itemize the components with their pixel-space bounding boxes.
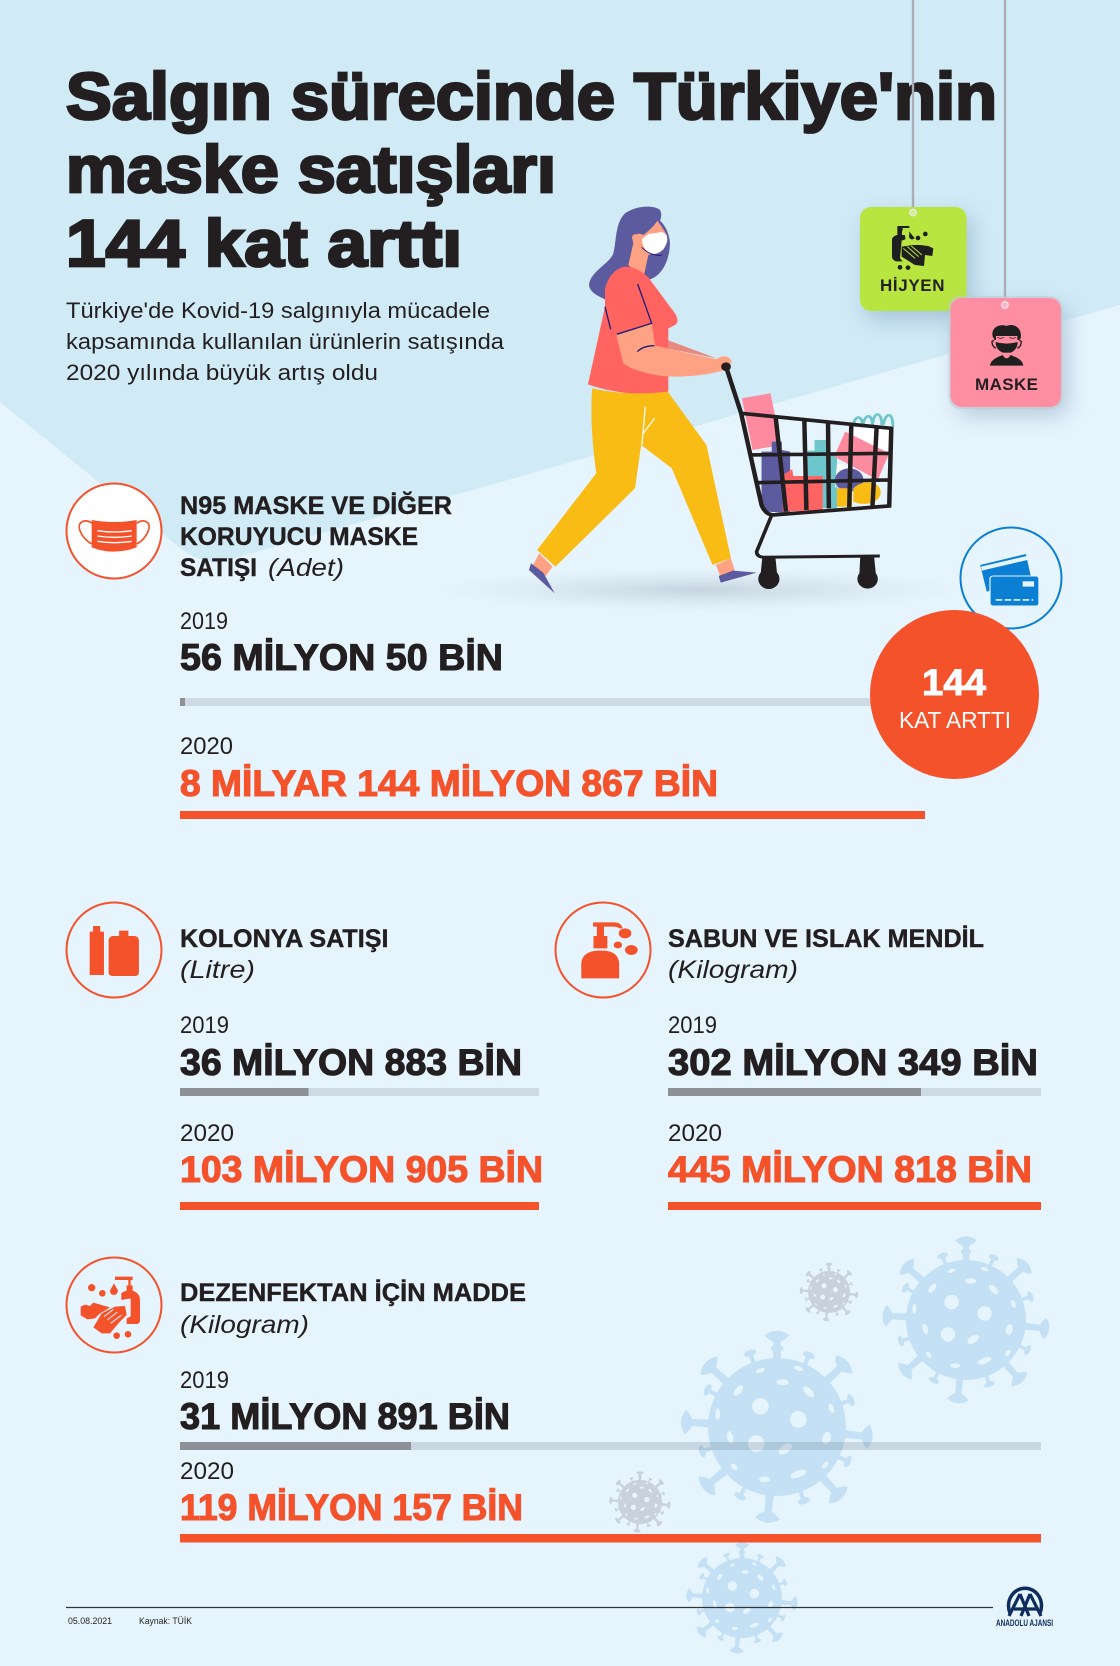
near arm [616, 323, 732, 377]
bar 2019 [180, 1088, 539, 1096]
virus small grey bottom [609, 1471, 671, 1533]
cart frame [726, 367, 891, 515]
heading: KOLONYA SATIŞI [180, 925, 388, 953]
hanging tag strings [913, 0, 1005, 300]
title: Salgın sürecinde Türkiye'nin [66, 59, 997, 133]
face mask [642, 232, 667, 254]
purple round item [835, 468, 864, 492]
2020 value: 2020 [180, 1120, 234, 1147]
2019 value: 36 MİLYON 883 BİN [180, 1042, 522, 1083]
heading [668, 925, 984, 984]
bar 2020 [180, 1202, 539, 1210]
2020 value: 445 MİLYON 818 BİN [668, 1149, 1032, 1190]
bar 2019 [668, 1088, 1041, 1096]
bar 2020 [180, 1534, 1041, 1542]
heading: (Litre) [180, 956, 255, 984]
bar 2020 [180, 811, 925, 819]
tag: hijyen: HİJYEN [880, 276, 944, 295]
2019 value [180, 608, 503, 678]
viruses in background [609, 1236, 1050, 1654]
2019 value [668, 1012, 1038, 1083]
2019 value [180, 1367, 510, 1437]
cart wheels [758, 557, 878, 589]
trouser highlight [642, 407, 655, 445]
red package [783, 469, 823, 512]
2020 value [180, 1120, 543, 1190]
section: N95 mask [66, 484, 925, 819]
subtitle text [66, 298, 505, 385]
background: blue top shape [0, 0, 1120, 562]
shirt [588, 267, 677, 394]
cart base [757, 515, 880, 557]
tag: hijyen [860, 207, 972, 320]
floor shadow under shopper [430, 568, 970, 612]
white shopping bag [849, 428, 890, 452]
tag: maske: MASKE [975, 375, 1038, 394]
2020 value: 2020 [180, 1458, 234, 1485]
date: 05.08.2021 [68, 1616, 112, 1627]
bar 2020 [668, 1202, 1041, 1210]
footer [66, 1608, 993, 1627]
illustration: woman with mask [529, 207, 757, 593]
far arm [667, 340, 717, 358]
2019 value: 2019 [180, 1012, 229, 1039]
illustration: shopping cart [721, 362, 893, 589]
cart handle knob [721, 362, 731, 371]
feet [533, 553, 735, 577]
icon: soap dispenser [556, 902, 650, 998]
pink box diagonal [834, 432, 889, 480]
2020 value [180, 733, 718, 804]
logo: Anadolu Ajansı [996, 1588, 1053, 1629]
trousers [537, 388, 731, 567]
mask under line [642, 247, 662, 255]
2019 value: 2019 [180, 608, 228, 635]
subtitle text: Türkiye'de Kovid-19 salgınıyla mücadele [66, 298, 490, 323]
bag handles [853, 414, 893, 427]
2020 value: 103 MİLYON 905 BİN [180, 1149, 543, 1190]
heading: N95 MASKE VE DİĞER [180, 491, 452, 520]
face and neck [628, 221, 667, 278]
heading: (Kilogram) [668, 956, 798, 984]
title [66, 59, 997, 280]
purple bottle [762, 442, 790, 513]
hair [589, 207, 670, 299]
callout: 144 kat arttı: 144 [922, 662, 986, 703]
heading: (Adet) [268, 554, 344, 582]
icon: sanitizer and hands [66, 1258, 162, 1352]
virus small grey top [799, 1263, 859, 1322]
ear [632, 234, 642, 245]
icon: bottle and hands [892, 226, 933, 270]
2020 value: 2020 [668, 1120, 722, 1147]
heading: DEZENFEKTAN İÇİN MADDE [180, 1279, 526, 1307]
bar 2019 [180, 698, 925, 706]
heading [180, 925, 388, 984]
2019 value: 56 MİLYON 50 BİN [180, 637, 503, 678]
2020 value: 2020 [180, 733, 233, 760]
heading: SABUN VE ISLAK MENDİL [668, 925, 984, 953]
white inner area [835, 463, 849, 488]
icon: person with mask [990, 325, 1023, 366]
2020 value: 119 MİLYON 157 BİN [180, 1487, 523, 1528]
title: 144 kat arttı [66, 206, 462, 280]
2019 value: 2019 [180, 1367, 229, 1394]
icon: credit cards circle [960, 528, 1062, 628]
title: maske satışları [66, 132, 556, 206]
sleeve lines [605, 284, 654, 352]
2020 value [668, 1120, 1032, 1190]
heading: KORUYUCU MASKE [180, 523, 418, 551]
2019 value [180, 1012, 522, 1083]
callout: 144 kat arttı: KAT ARTTI [899, 707, 1011, 733]
heading [180, 491, 452, 582]
icon: bottles [66, 902, 162, 998]
bar 2019 [180, 1442, 1041, 1450]
subtitle text: 2020 yılında büyük artış oldu [66, 360, 378, 385]
virus large [680, 1331, 874, 1524]
section: sabun [556, 902, 1041, 1210]
2020 value [180, 1458, 523, 1528]
pink box in cart [742, 393, 781, 450]
heading: (Kilogram) [180, 1311, 309, 1339]
subtitle text: kapsamında kullanılan ürünlerin satışında [66, 329, 505, 354]
heading [180, 1279, 526, 1339]
source: Kaynak: TÜİK [139, 1616, 193, 1627]
tag: maske [948, 296, 1067, 415]
logo: Anadolu Ajansı: ANADOLU AJANSI [996, 1618, 1053, 1629]
section: kolonya [66, 902, 543, 1210]
heading: SATIŞI [180, 554, 257, 582]
2019 value: 2019 [668, 1012, 717, 1039]
icon: mask [66, 484, 162, 578]
2019 value: 31 MİLYON 891 BİN [180, 1396, 510, 1437]
2019 value: 302 MİLYON 349 BİN [668, 1042, 1038, 1083]
section: dezenfektan [66, 1258, 1041, 1542]
yellow items [837, 482, 881, 507]
virus upper right [882, 1236, 1050, 1404]
2020 value: 8 MİLYAR 144 MİLYON 867 BİN [180, 763, 718, 804]
callout: 144 kat arttı [870, 610, 1039, 779]
virus bottom [686, 1542, 798, 1654]
teal bottle [808, 440, 837, 508]
shoes [529, 563, 757, 593]
